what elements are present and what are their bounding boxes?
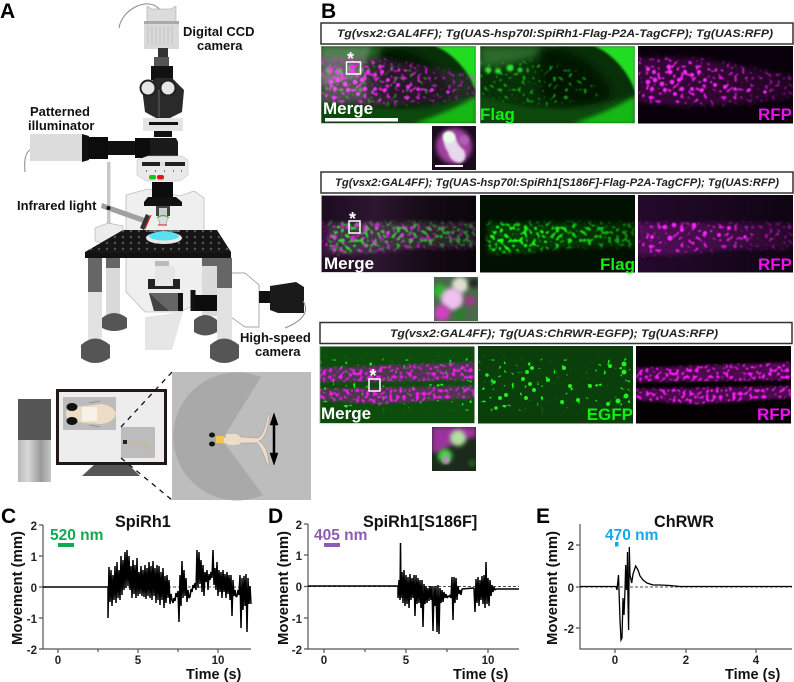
cable to CCD camera [119,4,160,28]
row 2 inset [433,277,479,321]
rear right leg [194,258,217,336]
movement trace [308,543,519,634]
genotype title row 3 [320,322,792,344]
x tick labels: 10 [212,655,224,667]
y tick labels [292,520,303,657]
region box and asterisk [349,209,360,233]
x tick labels: 0 [321,655,327,667]
y tick labels: 0 [296,582,302,594]
table with holes and dish [85,230,231,258]
genotype title row 1 [321,23,793,44]
transmitted-light housing back [126,189,204,312]
label: camera: camera [197,38,243,53]
y axis title: Movement (mm) [276,531,292,645]
row 1 flag label: Flag [480,105,515,124]
panel label B: B [321,0,336,23]
y axis title: Movement (mm) [545,531,561,645]
binocular head [140,66,184,118]
high-speed camera [231,273,306,328]
stimulus bar [324,543,340,547]
row 1 RFP image [638,46,793,124]
label: digital CCD camera: Digital CCD [183,24,254,39]
region box and asterisk: * [370,366,377,386]
infrared light on stand [95,162,151,245]
y tick labels: -2 [564,624,574,636]
lower optics [145,261,183,350]
monitor inset: head view [63,397,116,430]
row 2 RFP image [638,195,794,273]
chart title: SpiRh1 [115,513,171,531]
y tick labels: 2 [31,521,37,533]
axes [39,525,251,653]
chart D: SpiRh1[S186F] movement [276,513,519,682]
y tick labels: -1 [27,614,38,626]
x tick labels: 10 [482,655,494,667]
y tick labels: 2 [296,520,302,532]
x tick labels: 0 [612,655,618,667]
y tick labels [564,541,574,636]
x tick labels: 5 [135,655,142,667]
axes [304,524,519,653]
row 2 flag image [480,195,636,273]
x tick labels: 4 [753,655,760,667]
row 3 EGFP image [478,346,634,424]
row 1 RFP label: RFP [758,105,792,124]
y axis title: Movement (mm) [10,531,26,645]
row 3 RFP image [636,346,792,424]
x tick labels [321,655,494,667]
chart C: SpiRh1 movement [10,513,251,682]
row 2 merge label: Merge [324,254,374,273]
panel label D: D [268,505,283,528]
label: infrared light: Infrared light [17,198,97,213]
zero line [308,586,519,588]
row 3 EGFP label: EGFP [587,405,633,424]
label: patterned: Patterned [30,104,90,119]
chart title: SpiRh1[S186F] [363,513,477,531]
y tick labels: 1 [31,552,38,564]
row 1 inset [432,126,476,170]
stimulus bar [58,543,74,547]
label: high-speed: High-speed [240,330,311,345]
row 2 flag label: Flag [600,255,635,274]
x tick labels: 5 [403,655,410,667]
region box and asterisk [369,366,380,391]
y tick labels: -2 [27,645,37,657]
chart E: ChRWR movement [545,513,792,682]
row 1 flag image [480,46,635,124]
row 3 merge image [320,346,476,424]
genotype title row 2 [321,172,793,193]
y tick labels: -2 [292,645,302,657]
region box and asterisk [346,49,360,74]
monitor inset: tail view [121,427,155,458]
chart title: ChRWR [654,513,714,531]
row 1 merge label: Merge [323,99,373,118]
region box and asterisk: * [347,49,354,69]
zero line [580,586,792,588]
x tick labels [612,655,760,667]
row 3 inset [432,427,476,471]
row 3 merge label: Merge [321,404,371,423]
stimulus luminance strip [18,399,51,482]
front right leg [210,258,239,363]
genotype title row 2: Tg(vsx2:GAL4FF); Tg(UAS-hsp70l:SpiRh1[S186F]-Flag-P2A-TagCFP); Tg(UAS:RFP) [335,177,779,189]
panel label C: C [1,505,16,528]
filter plate [143,118,183,136]
cable to illuminator [25,149,31,172]
panel A: microscope setup [25,4,306,363]
y tick labels: 1 [296,551,303,563]
label: high-speed camera: camera [255,344,301,359]
illumination arm [30,131,178,162]
zoom dashed lines [121,372,172,500]
digital CCD camera icon [144,6,179,67]
y tick labels: 2 [568,541,574,553]
front left leg [81,258,110,363]
panel label E: E [536,505,550,528]
double arrow [270,413,278,465]
row 3 RFP label: RFP [757,405,791,424]
y tick labels: -1 [292,614,303,626]
panel label A: A [0,0,15,23]
movement trace [580,547,792,640]
camera tube [193,290,233,311]
region box and asterisk: * [349,209,356,229]
y tick labels [27,521,38,657]
stimulus label: 520 nm [50,527,103,544]
row 2 merge image [321,195,477,273]
genotype title row 3: Tg(vsx2:GAL4FF); Tg(UAS:ChRWR-EGFP); Tg(UAS:RFP) [390,328,719,340]
x tick labels: 0 [55,655,61,667]
y tick labels: 0 [568,583,574,595]
scale bar [325,118,398,122]
label: illuminator: illuminator [28,118,94,133]
monitor [58,390,166,476]
larva with tail [209,414,270,464]
row 2 RFP label: RFP [758,255,792,274]
objective turret [144,182,182,225]
stimulus bar [615,542,618,546]
inset scale bar [435,165,463,167]
x tick labels [55,655,224,667]
y tick labels: 0 [31,583,37,595]
stimulus label: 470 nm [605,527,658,544]
stimulus label: 405 nm [314,527,367,544]
genotype title row 1: Tg(vsx2:GAL4FF); Tg(UAS-hsp70l:SpiRh1-Flag-P2A-TagCFP); Tg(UAS:RFP) [337,28,774,40]
rear left leg [102,258,127,331]
control box with buttons [137,156,188,181]
row 1 merge image [321,46,476,124]
x tick labels: 2 [683,655,689,667]
movement trace [43,550,251,632]
axes [576,524,792,653]
zero line [43,586,251,588]
virtual arena panel [172,372,311,500]
